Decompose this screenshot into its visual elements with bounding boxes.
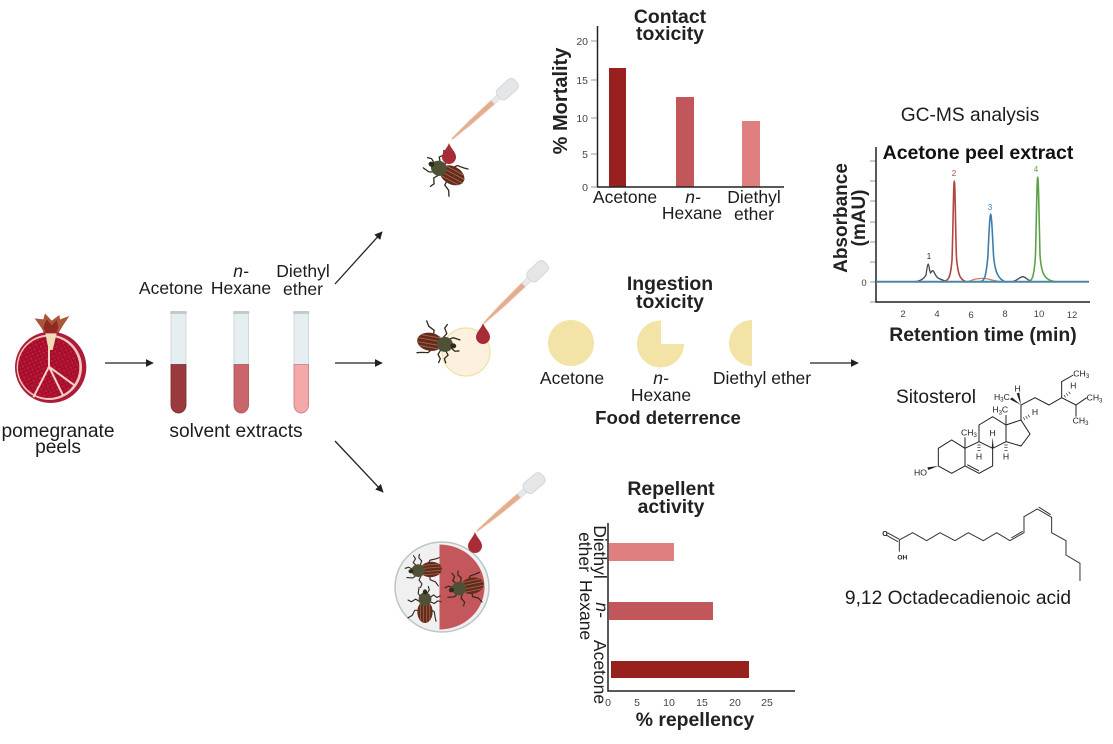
food deterrence labels <box>540 368 811 405</box>
test tube: acetone <box>170 311 187 413</box>
chromatogram: acetone peel extract: 12 <box>1067 310 1077 321</box>
chemical structure: sitosterol: C <box>1004 392 1010 402</box>
food disc: diethyl ether <box>729 320 752 366</box>
solvent labels: Acetone <box>139 278 203 298</box>
pomegranate peels label: peels <box>35 437 81 458</box>
chemical structure: sitosterol: CH <box>1073 368 1086 378</box>
chromatogram: acetone peel extract: 4 <box>1034 165 1039 174</box>
chemical structure: sitosterol: CH <box>1087 393 1099 403</box>
chromatogram: acetone peel extract: Absorbance <box>831 163 852 273</box>
bar chart: repellent activity: 10 <box>663 697 675 709</box>
chromatogram: acetone peel extract: 0 <box>861 278 867 289</box>
bar chart: contact toxicity: 10 <box>576 113 588 125</box>
food deterrence labels: n- <box>653 368 669 388</box>
chemical structure: sitosterol: 3 <box>999 410 1003 416</box>
food deterrence labels: Hexane <box>631 385 691 405</box>
chemical structure: linoleic acid <box>882 507 1080 581</box>
chemical structure: sitosterol: HO <box>914 468 927 478</box>
repellent activity title: Repellent <box>627 478 715 500</box>
chemical structure: sitosterol: 3 <box>1086 374 1090 380</box>
solvent labels: ether <box>283 279 323 299</box>
icon: weevil with contact drop <box>416 77 520 199</box>
arrow: to ingestion toxicity <box>335 362 382 364</box>
chemical structure: linoleic acid: OH <box>897 555 908 562</box>
solvent labels: n- <box>233 261 249 281</box>
chemical structure: sitosterol: H <box>992 405 999 415</box>
chemical structure: sitosterol: H <box>990 428 996 438</box>
chemical structure: sitosterol: H <box>1015 384 1021 394</box>
bar chart: repellent activity <box>575 523 795 731</box>
food disc: n-hexane <box>637 320 684 367</box>
repellent activity title: activity <box>638 496 705 518</box>
solvent extracts label: solvent extracts <box>169 421 303 442</box>
bar chart: contact toxicity: 20 <box>576 36 588 48</box>
chromatogram: acetone peel extract: 1 <box>927 252 932 261</box>
food deterrence caption: Food deterrence <box>595 407 741 428</box>
bar chart: repellent activity: 15 <box>696 697 708 709</box>
bar chart: repellent activity: Diethyl <box>590 525 610 579</box>
ingestion toxicity title: toxicity <box>636 291 704 313</box>
arrow: to contact toxicity <box>335 232 382 284</box>
chemical structure: sitosterol: CH <box>961 427 974 437</box>
octadecadienoic acid label: 9,12 Octadecadienoic acid <box>845 588 1071 609</box>
food disc: acetone <box>548 320 594 366</box>
chemical structure: sitosterol: 3 <box>1099 398 1103 404</box>
pomegranate icon <box>15 313 86 403</box>
chromatogram: acetone peel extract: 2 <box>952 169 957 178</box>
chemical structure: sitosterol: H <box>1070 381 1076 391</box>
food deterrence labels: Acetone <box>540 368 604 388</box>
bar chart: contact toxicity <box>550 26 784 224</box>
chromatogram: acetone peel extract: (mAU) <box>849 190 870 246</box>
chromatogram: acetone peel extract: 8 <box>1002 309 1008 320</box>
chromatogram: acetone peel extract: 3 <box>988 203 993 212</box>
bar chart: contact toxicity: Hexane <box>662 203 722 223</box>
pomegranate peels label: pomegranate <box>1 421 115 442</box>
test tube: n-hexane <box>233 311 250 413</box>
bar chart: contact toxicity: 15 <box>576 75 588 87</box>
chemical structure: sitosterol: H <box>1032 407 1038 417</box>
bar chart: repellent activity: 20 <box>729 697 741 709</box>
test tube: diethyl ether <box>293 311 310 413</box>
chromatogram: acetone peel extract: Acetone peel extract <box>883 142 1074 164</box>
bar chart: repellent activity: 5 <box>634 697 640 709</box>
bar chart: contact toxicity: n- <box>685 187 701 207</box>
chromatogram: acetone peel extract <box>831 142 1090 346</box>
chemical structure: sitosterol: C <box>1002 405 1008 415</box>
icon: weevil on food disc <box>414 259 550 376</box>
arrow: to repellent activity <box>335 441 383 492</box>
chemical structure: sitosterol: H <box>994 392 1000 402</box>
solvent labels: Hexane <box>211 278 271 298</box>
bar chart: contact toxicity: 5 <box>582 149 588 161</box>
bar chart: repellent activity: Hexane <box>576 580 596 640</box>
solvent labels <box>139 261 330 299</box>
bar chart: contact toxicity: 0 <box>582 182 588 194</box>
contact toxicity title: Contact <box>634 6 707 28</box>
food deterrence labels: Diethyl ether <box>713 368 811 388</box>
contact toxicity title: toxicity <box>636 23 704 45</box>
chemical structure: sitosterol: H <box>1003 451 1009 461</box>
chromatogram: acetone peel extract: 4 <box>934 309 940 320</box>
arrow: to GC-MS analysis <box>810 362 858 364</box>
chemical structure: sitosterol: H <box>976 451 982 461</box>
ingestion toxicity title: Ingestion <box>627 273 713 295</box>
bar chart: repellent activity: % repellency <box>636 709 754 731</box>
bar chart: contact toxicity: Diethyl <box>727 187 781 207</box>
bar chart: repellent activity: 25 <box>761 697 773 709</box>
solvent labels: Diethyl <box>276 261 330 281</box>
bar chart: repellent activity: ether <box>575 532 595 572</box>
chemical structure: linoleic acid: O <box>882 531 888 538</box>
bar chart: contact toxicity: ether <box>734 204 774 224</box>
sitosterol label: Sitosterol <box>896 387 976 408</box>
bar chart: repellent activity: n- <box>592 602 612 618</box>
bar chart: repellent activity: 0 <box>605 697 611 709</box>
arrow: peels to extracts <box>105 362 153 364</box>
bar chart: contact toxicity: % Mortality <box>550 47 572 154</box>
chromatogram: acetone peel extract: 6 <box>968 310 974 321</box>
chemical structure: sitosterol: CH <box>1073 415 1085 425</box>
icon: petri dish with weevils <box>395 471 547 632</box>
chromatogram: acetone peel extract: 2 <box>900 309 906 320</box>
chemical structure: sitosterol: 3 <box>974 433 978 439</box>
bar chart: repellent activity: Acetone <box>590 640 610 704</box>
chemical structure: sitosterol: 3 <box>1085 421 1089 427</box>
GC-MS analysis heading: GC-MS analysis <box>901 105 1039 126</box>
bar chart: contact toxicity: Acetone <box>593 187 657 207</box>
chromatogram: acetone peel extract: Retention time (min) <box>889 324 1077 346</box>
chemical structure: sitosterol <box>914 368 1103 478</box>
chemical structure: sitosterol: 3 <box>1000 398 1004 404</box>
chromatogram: acetone peel extract: 10 <box>1034 309 1044 320</box>
